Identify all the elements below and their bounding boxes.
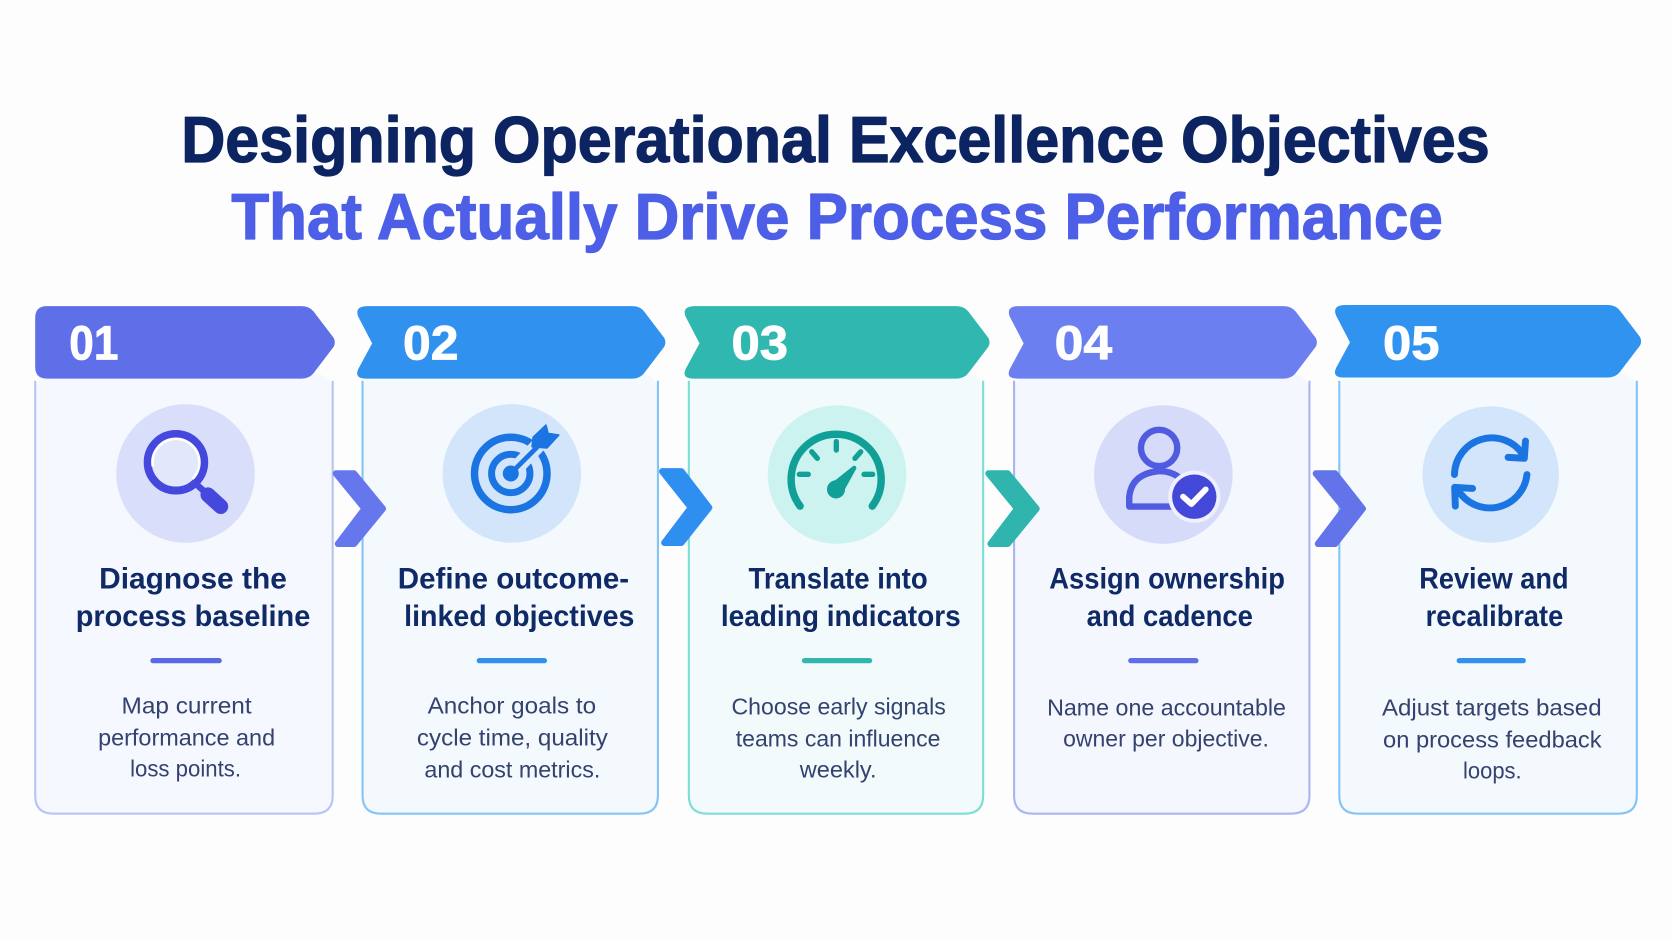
title: That Actually Drive Process Performance	[231, 180, 1443, 253]
step 02 heading	[398, 563, 634, 633]
step 03 description: teams can influence	[736, 725, 940, 751]
step 01 description: loss points.	[130, 755, 241, 781]
icon: refresh cycle arrows	[1422, 406, 1559, 543]
icon: target with arrow	[443, 404, 581, 543]
panel: step 05 review	[1335, 305, 1641, 814]
step 01 number: 01	[69, 317, 118, 370]
step 05 heading	[1419, 563, 1569, 633]
step 01 heading: Diagnose the	[99, 563, 287, 596]
step 05 heading: Review and	[1419, 563, 1569, 596]
step 01 heading: process baseline	[76, 600, 310, 633]
arrow: step 4 to 5	[1316, 473, 1363, 544]
step 03 description: weekly.	[799, 756, 877, 782]
panel: step 04 assign	[1009, 306, 1317, 814]
step 04 description: owner per objective.	[1063, 725, 1269, 751]
icon: magnifying glass	[116, 404, 255, 543]
step 02 description: Anchor goals to	[428, 692, 596, 718]
step 01 description: Map current	[122, 692, 252, 718]
step 05 number: 05	[1383, 317, 1440, 370]
step 02 header	[357, 306, 665, 379]
step 05 description: loops.	[1463, 757, 1522, 783]
step 05 description	[1382, 695, 1602, 783]
title	[181, 103, 1490, 253]
icon: speedometer gauge	[768, 405, 906, 544]
step 03 heading: leading indicators	[721, 600, 961, 633]
panel: step 01 diagnose	[35, 306, 335, 814]
step 05 heading: recalibrate	[1426, 600, 1563, 633]
arrow: step 2 to 3	[662, 471, 709, 543]
step 05 description: on process feedback	[1383, 727, 1602, 753]
icon: person with checkmark	[1094, 405, 1233, 544]
step 04 heading: Assign ownership	[1049, 563, 1285, 596]
step 03 number: 03	[732, 317, 788, 370]
step 03 description: Choose early signals	[732, 693, 946, 719]
step 04 number: 04	[1055, 317, 1113, 370]
title: Designing Operational Excellence Objectives	[181, 103, 1490, 176]
step 03 heading: Translate into	[749, 563, 928, 596]
step 02 heading: linked objectives	[404, 600, 634, 633]
step 01 description	[98, 692, 275, 781]
step 01 description: performance and	[98, 724, 275, 750]
step 04 description	[1047, 695, 1286, 751]
step 02 description: cycle time, quality	[417, 724, 608, 750]
step 04 heading	[1049, 563, 1285, 633]
step 03 description	[732, 693, 946, 782]
step 03 heading	[721, 563, 961, 633]
panel: step 03 translate	[685, 306, 990, 814]
step 01 heading	[76, 563, 310, 633]
arrow: step 1 to 2	[336, 473, 383, 544]
step 02 heading: Define outcome-	[398, 563, 629, 596]
step 04 heading: and cadence	[1087, 600, 1253, 633]
panel: step 02 define	[357, 306, 665, 814]
step 05 description: Adjust targets based	[1382, 695, 1602, 721]
step 04 description: Name one accountable	[1047, 695, 1286, 721]
step 04 header	[1009, 306, 1317, 379]
arrow: step 3 to 4	[988, 473, 1036, 544]
step 03 header	[685, 306, 990, 379]
step 05 header	[1335, 305, 1641, 378]
step 01 header	[35, 306, 335, 379]
step 02 description: and cost metrics.	[424, 756, 600, 782]
step 02 description	[417, 692, 608, 782]
step 02 number: 02	[403, 317, 459, 370]
